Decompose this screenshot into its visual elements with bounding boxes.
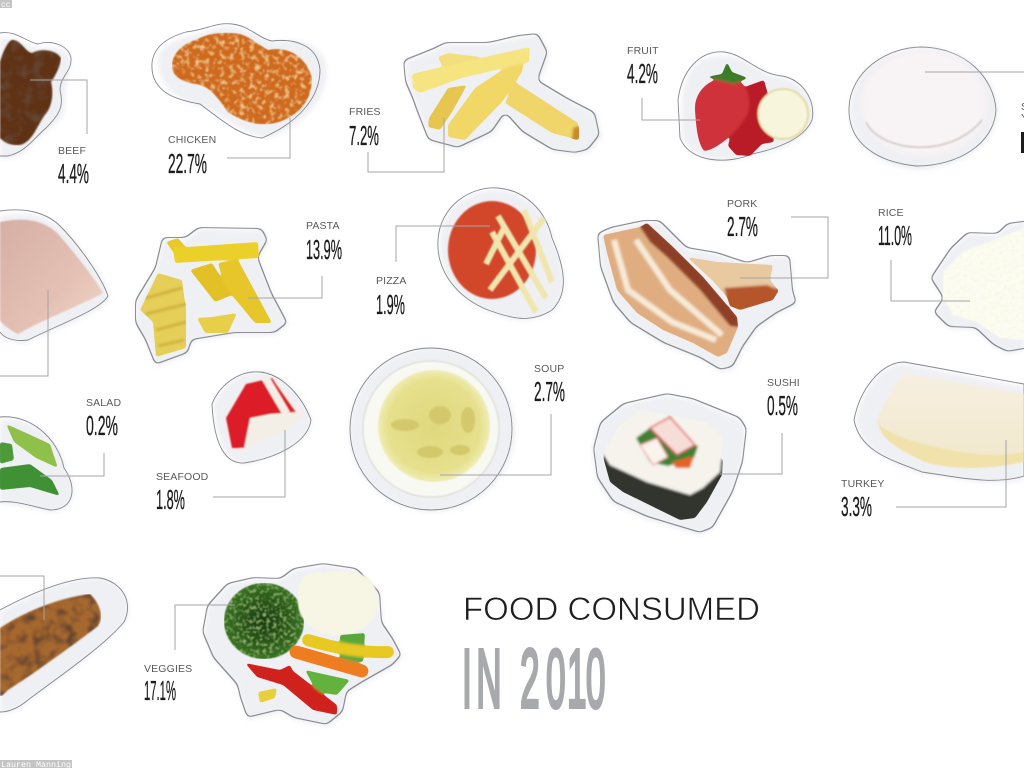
banana slice [758,89,808,139]
leader line [368,118,444,172]
panel: fries [349,33,602,172]
text: 2.7% [534,376,565,407]
ham photo [0,220,103,334]
cauliflower [298,571,378,635]
label: VEGGIES [144,663,192,675]
panel: rice [878,207,1024,354]
panel: ham [0,210,110,376]
panel: fries: 7.2% [349,120,379,151]
title [462,591,760,725]
leader line [227,118,290,158]
chicken photo [172,33,312,124]
panel: chicken [152,24,327,179]
license badge: cc [1,1,11,10]
subtitle year: IN 2010 [462,633,605,725]
panel: veggies: 17.1% [144,675,176,706]
panel: seafood: 1.8% [156,484,185,515]
value: 0.2% [86,410,118,441]
panel: pizza [376,188,564,320]
label: SOUP [534,363,564,375]
label: FRUIT [627,45,659,57]
rice photo [943,228,1024,340]
leader line [30,80,87,134]
panel: pizza: 1.9% [376,289,405,320]
leader line [175,605,235,650]
broccoli [224,583,304,659]
label: PORK [727,198,757,210]
panel: pork [597,198,828,372]
text: 4.4% [58,158,89,189]
panel: salad [0,397,121,512]
label: FRIES [349,106,381,118]
strawberries [695,62,774,156]
leader line [0,290,48,376]
title: FOOD CONSUMED [463,591,760,627]
panel: seafood [156,372,312,515]
pepper slices [245,633,388,715]
pizza photo [448,201,536,299]
fries photo [412,47,579,140]
text: 13.9% [306,234,342,265]
panel: yogurt plate [849,47,1024,170]
panel: meatloaf [0,576,129,714]
label: PIZZA [376,275,407,287]
panel: rice: 11.0% [878,220,912,251]
leader line [248,276,322,298]
leader line [396,226,490,262]
turkey photo [876,374,1024,468]
beef photo [0,40,61,145]
label: RICE [878,207,904,219]
panel: pasta [135,220,342,367]
crab stick [226,378,304,450]
label: SALAD [86,397,121,409]
label: PASTA [306,220,340,232]
panel: turkey: 3.3% [841,491,872,522]
bacon strips [603,223,779,357]
panel: pork: 2.7% [727,211,758,242]
leader line [642,98,700,120]
panel: chicken: 22.7% [168,148,207,179]
label: SUSHI [767,377,800,389]
label: BEEF [58,145,86,157]
panel: sushi: 0.5% [767,390,798,421]
label: CHICKEN [168,134,216,146]
meatloaf photo [0,594,101,696]
leader line [440,414,551,475]
noodles [391,406,475,458]
leader line [896,440,1006,507]
sushi roll [602,410,723,520]
panel: turkey [841,362,1024,522]
leader line [891,260,970,301]
leader line [40,453,104,476]
panel: soup [349,348,565,512]
clipped value stem [1021,132,1024,153]
panel: sushi [592,377,800,535]
label: SEAFOOD [156,471,209,483]
leader line [720,433,782,474]
label: TURKEY [841,478,884,490]
leader line [0,576,44,620]
panel: fruit: 4.2% [627,58,658,89]
panel: fruit [627,45,814,161]
leader line [213,430,285,497]
leader line [925,71,1024,73]
soup bowl [363,361,499,497]
leader line [740,217,828,278]
panel: beef [0,33,89,189]
panel: veggies [144,563,403,727]
pasta photo [140,238,272,357]
yogurt photo [861,50,987,156]
salad leaves [0,424,60,496]
